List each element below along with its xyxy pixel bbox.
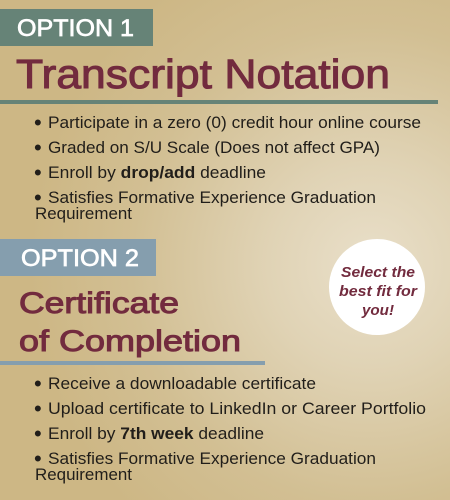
option 2 bullet list: Requirement — [35, 465, 132, 484]
option 1 bullet list: • — [34, 185, 42, 210]
option 1 bullet list: Requirement — [35, 204, 132, 223]
heading: transcript notation: Transcript Notation — [16, 51, 390, 97]
option 1 bullet list: • — [34, 135, 42, 160]
panel: option 2 — [0, 239, 426, 484]
panel: option 1 — [0, 9, 438, 223]
heading: certificate of completion: Certificate — [19, 287, 179, 320]
option 1 rule — [0, 100, 438, 104]
callout: select the best fit: best fit for — [339, 283, 418, 300]
option 2 bullet list: Enroll by 7th week deadline — [48, 424, 264, 443]
option 2 bullet list: • — [34, 396, 42, 421]
callout: select the best fit: Select the — [341, 264, 415, 281]
option 2 bullet list: • — [34, 421, 42, 446]
heading: certificate of completion — [19, 287, 241, 358]
option 1 badge — [0, 9, 153, 46]
option 1 bullet list: Participate in a zero (0) credit hour online course — [48, 113, 421, 132]
option 1 bullet list: • — [34, 160, 42, 185]
option 1 bullet list: • — [34, 110, 42, 135]
option 2 bullet list: • — [34, 446, 42, 471]
callout: select the best fit — [329, 239, 425, 335]
option 2 badge: OPTION 2 — [21, 245, 139, 272]
option 2 badge — [0, 239, 156, 276]
option 1 bullet list: Enroll by drop/add deadline — [48, 163, 266, 182]
option 2 rule — [0, 361, 265, 365]
option 1 bullet list: Satisfies Formative Experience Graduation — [48, 188, 376, 207]
option 2 bullet list: Satisfies Formative Experience Graduation — [48, 449, 376, 468]
option 2 bullet list: • — [34, 371, 42, 396]
option 2 bullet list: Receive a downloadable certificate — [48, 374, 316, 393]
option 1 badge: OPTION 1 — [17, 15, 134, 42]
heading: certificate of completion: of Completion — [19, 325, 241, 358]
option 1 bullet list: Graded on S/U Scale (Does not affect GPA) — [48, 138, 380, 157]
option 2 bullet list: Upload certificate to LinkedIn or Career Portfolio — [48, 399, 426, 418]
option 1 bullet list — [34, 110, 421, 223]
callout: select the best fit: you! — [361, 302, 394, 319]
option 2 bullet list — [34, 371, 426, 484]
